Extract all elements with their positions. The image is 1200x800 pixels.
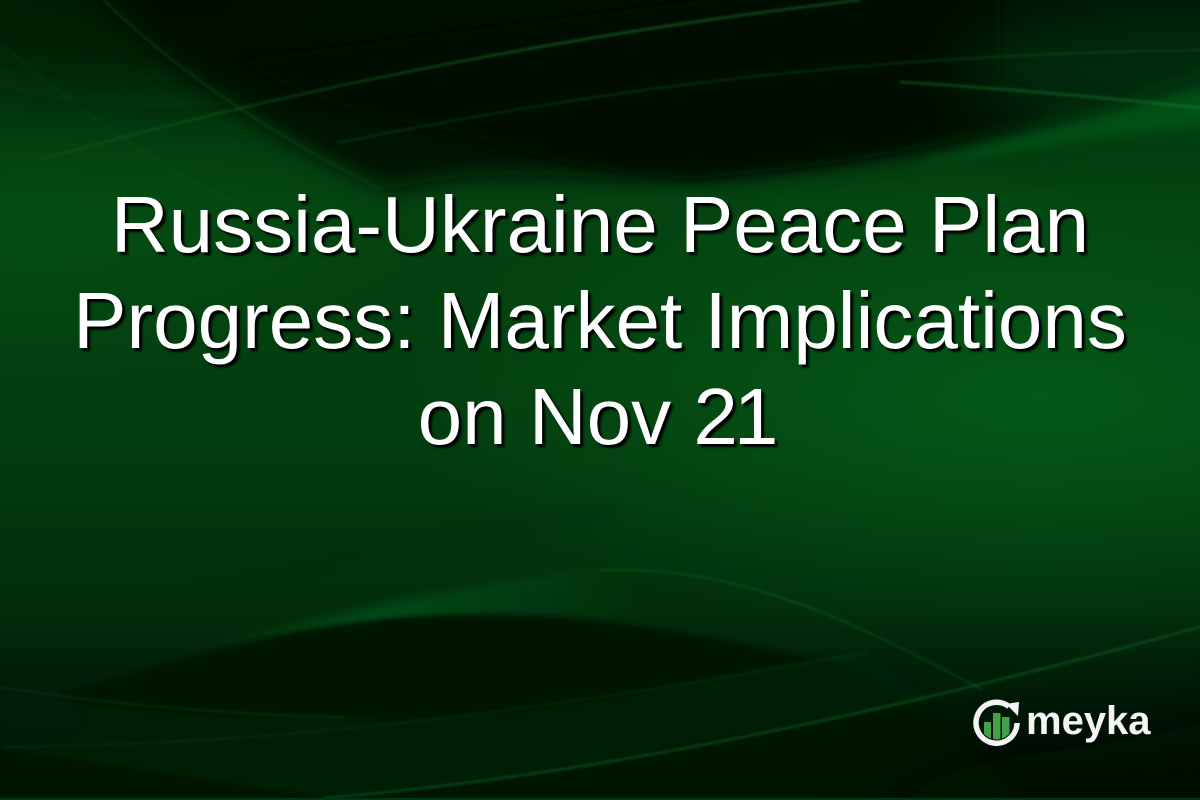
title: [73, 180, 1128, 461]
wordmark: meyka: [1026, 699, 1151, 743]
bottom light wedge: [77, 560, 640, 693]
icon: growth chart in circular arrow: [976, 702, 1019, 744]
mid band inside hump: [0, 652, 930, 798]
bottom dark hump: [0, 615, 1060, 800]
title: Russia-Ukraine Peace Plan: [111, 180, 1089, 269]
top right glow: [960, 0, 1200, 140]
top thin strands: [0, 0, 1200, 210]
top light bands: [900, 85, 1200, 170]
logo: meyka: [973, 699, 1151, 746]
bottom fade: [0, 610, 1200, 800]
title: Progress: Market Implications: [73, 276, 1127, 365]
title: on Nov 21: [418, 372, 778, 461]
bottom edge line: [0, 798, 1200, 800]
top dark lens: [240, 0, 1045, 178]
bottom dark streak: [200, 515, 610, 595]
top dark field: [60, 0, 1200, 190]
left top corner dark: [0, 0, 300, 80]
lower thin strands: [0, 570, 1200, 798]
